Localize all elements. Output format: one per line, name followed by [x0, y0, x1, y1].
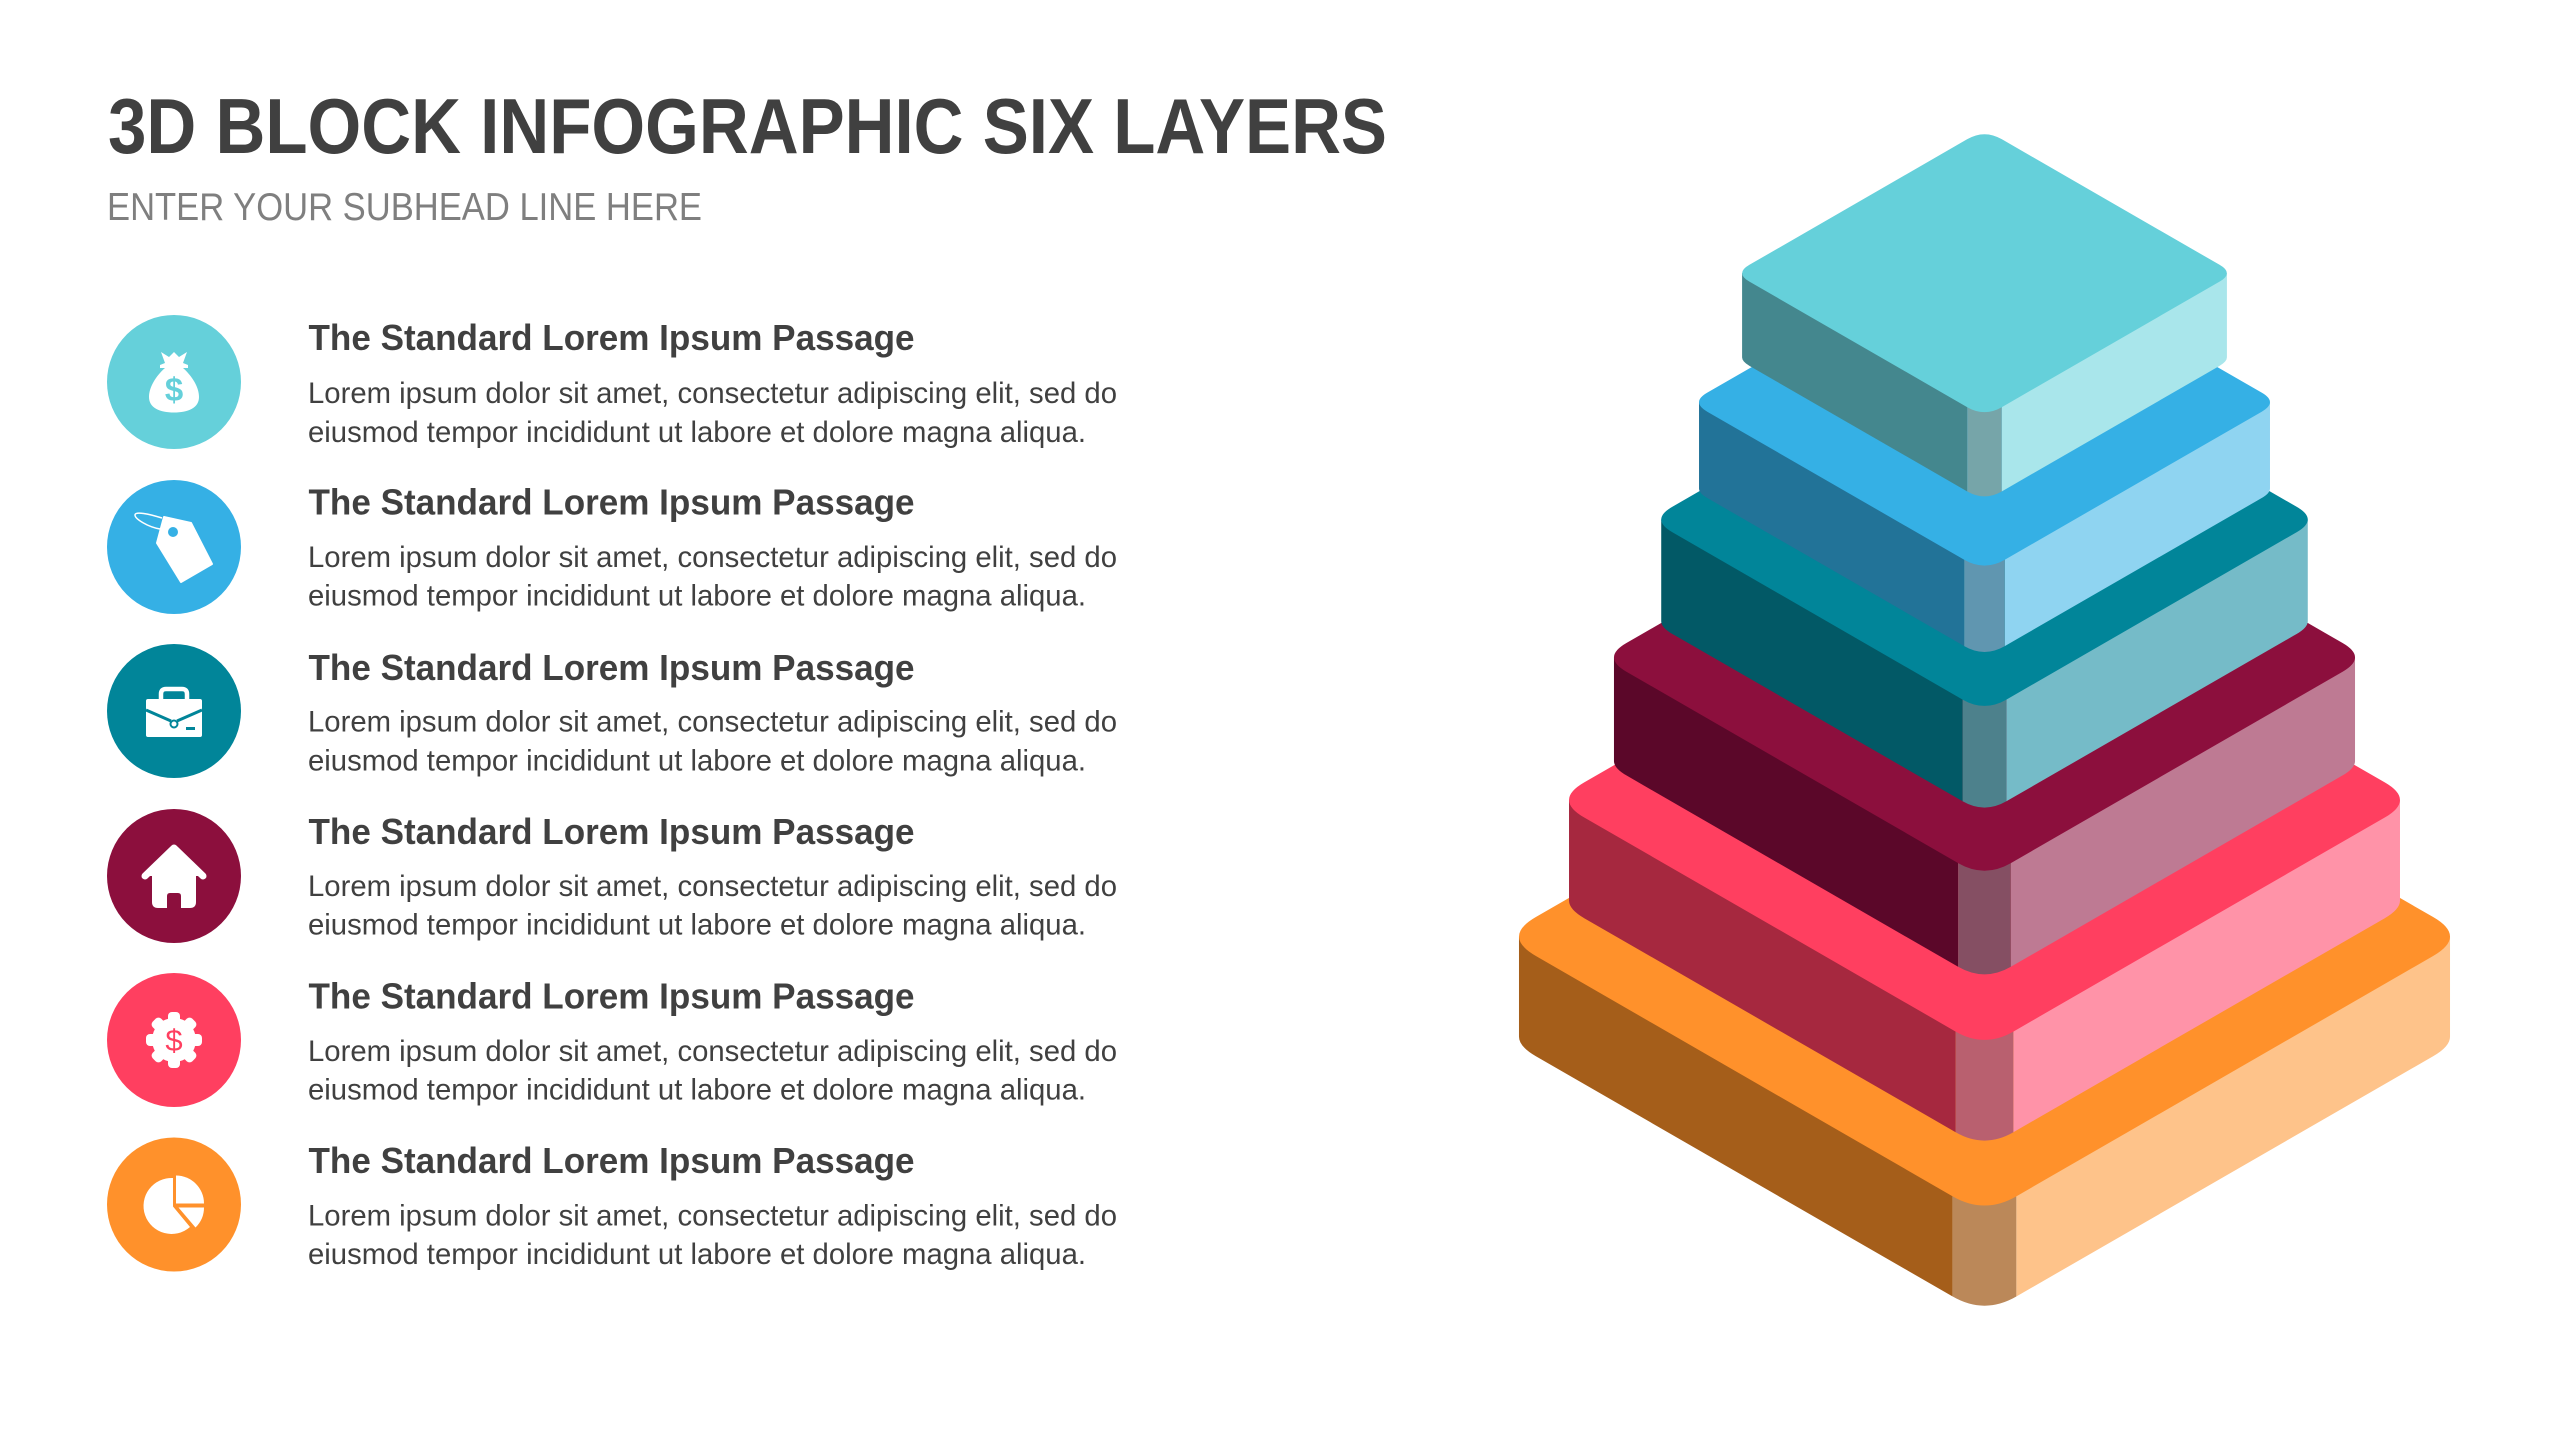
body text 6: [308, 1199, 1117, 1271]
icon: pie chart: [107, 1138, 241, 1272]
subtitle: ENTER YOUR SUBHEAD LINE HERE: [107, 186, 702, 229]
body text 4: [308, 870, 1117, 942]
body text 1: eiusmod tempor incididunt ut labore et dolore magna aliqua.: [308, 416, 1086, 449]
body text 5: Lorem ipsum dolor sit amet, consectetur adipiscing elit, sed do: [308, 1035, 1117, 1068]
body text 2: eiusmod tempor incididunt ut labore et dolore magna aliqua.: [308, 580, 1086, 613]
heading 1: The Standard Lorem Ipsum Passage: [308, 317, 914, 358]
body text 1: Lorem ipsum dolor sit amet, consectetur adipiscing elit, sed do: [308, 377, 1117, 410]
body text 6: Lorem ipsum dolor sit amet, consectetur adipiscing elit, sed do: [308, 1199, 1117, 1232]
list item 6: [107, 1138, 1117, 1272]
title: 3D BLOCK INFOGRAPHIC SIX LAYERS: [108, 82, 1387, 170]
list item 1: [107, 315, 1117, 449]
block 1: light teal top: [1742, 134, 2227, 496]
block 4: maroon: [1614, 444, 2355, 974]
3D pyramid of six blocks: [1519, 134, 2450, 1306]
icon: briefcase: [107, 644, 241, 778]
body text 5: eiusmod tempor incididunt ut labore et dolore magna aliqua.: [308, 1074, 1086, 1107]
body text 5: [308, 1035, 1117, 1107]
list item 3: [107, 644, 1117, 778]
list item 5: [107, 973, 1117, 1107]
body text 3: eiusmod tempor incididunt ut labore et dolore magna aliqua.: [308, 744, 1086, 777]
icon: gear with dollar: [107, 973, 241, 1107]
body text 2: Lorem ipsum dolor sit amet, consectetur adipiscing elit, sed do: [308, 541, 1117, 574]
body text 6: eiusmod tempor incididunt ut labore et dolore magna aliqua.: [308, 1238, 1086, 1271]
body text 2: [308, 541, 1117, 613]
body text 4: Lorem ipsum dolor sit amet, consectetur adipiscing elit, sed do: [308, 870, 1117, 903]
body text 4: eiusmod tempor incididunt ut labore et dolore magna aliqua.: [308, 909, 1086, 942]
icon: price tag: [107, 480, 241, 614]
list item 2: [107, 480, 1117, 614]
list item 4: [107, 809, 1117, 943]
body text 3: Lorem ipsum dolor sit amet, consectetur adipiscing elit, sed do: [308, 706, 1117, 739]
body text 3: [308, 706, 1117, 777]
heading 2: The Standard Lorem Ipsum Passage: [308, 482, 914, 523]
block 6: orange base: [1519, 668, 2450, 1306]
block 3: dark teal: [1661, 333, 2308, 808]
block 5: pink: [1569, 560, 2400, 1141]
icon: house: [107, 809, 241, 943]
heading 6: The Standard Lorem Ipsum Passage: [308, 1140, 914, 1181]
body text 1: [308, 377, 1117, 449]
icon: money bag: [107, 315, 241, 449]
block 2: blue: [1699, 239, 2270, 652]
heading 4: The Standard Lorem Ipsum Passage: [308, 811, 914, 852]
heading 3: The Standard Lorem Ipsum Passage: [308, 647, 914, 688]
heading 5: The Standard Lorem Ipsum Passage: [308, 976, 914, 1017]
icon: gear with dollar: $: [165, 1023, 183, 1058]
icon: money bag: $: [165, 371, 183, 408]
